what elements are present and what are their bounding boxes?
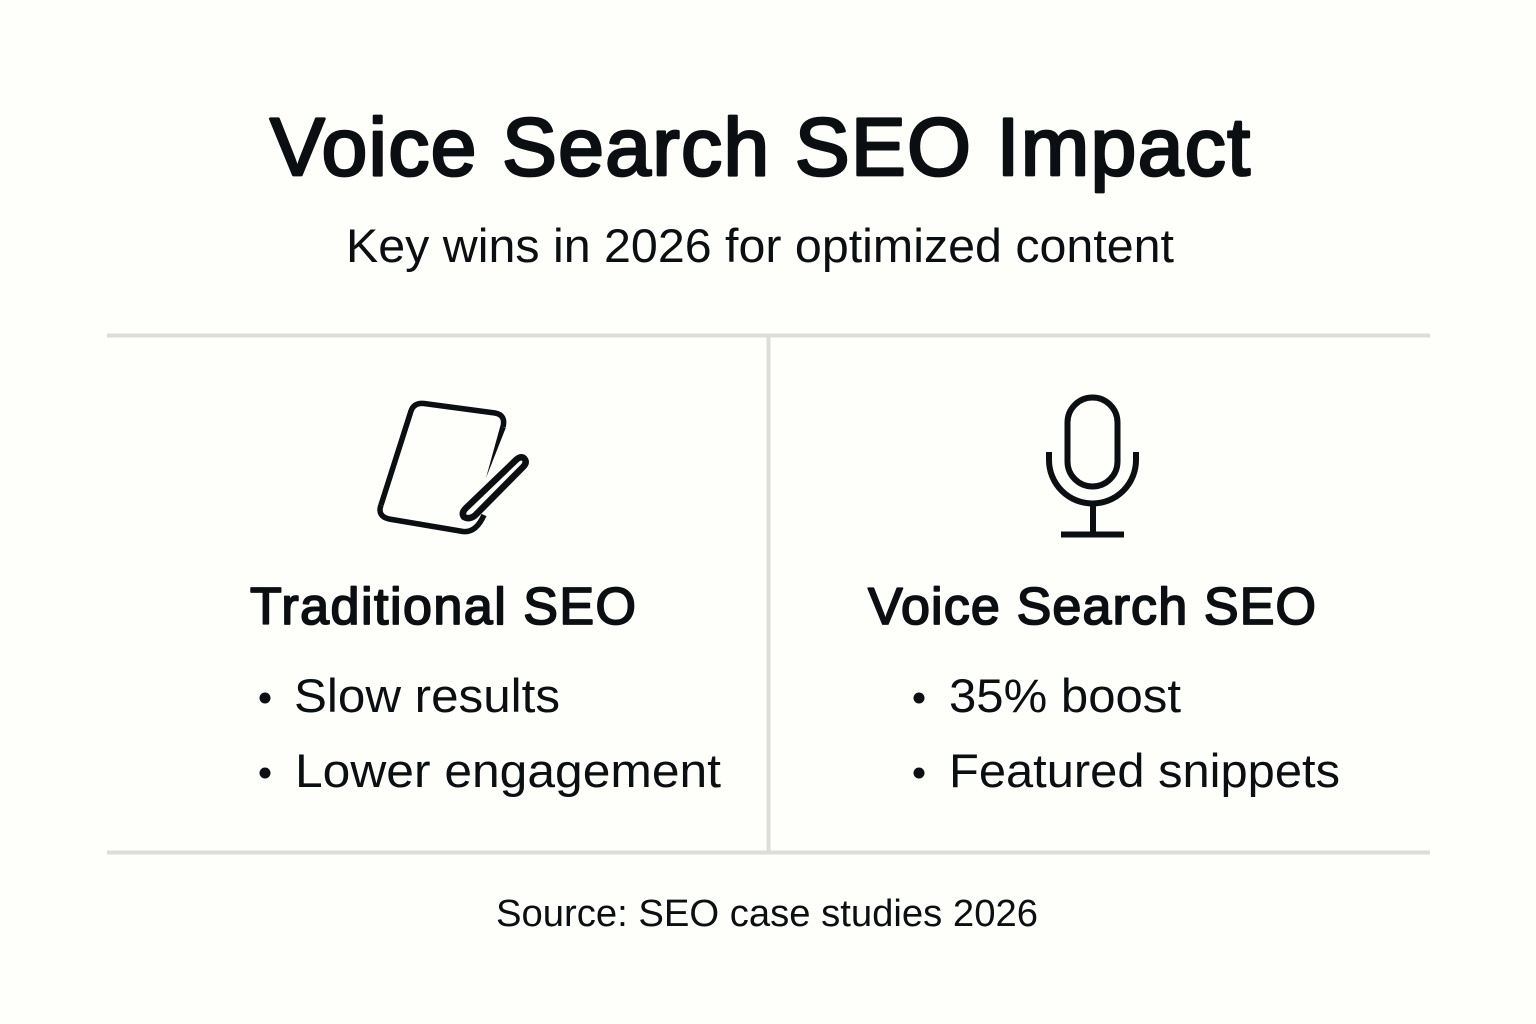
source note: Source: SEO case studies 2026	[496, 893, 1038, 935]
bullet list: traditional: Slow results	[294, 669, 560, 722]
heading: Traditional SEO: Traditional SEO	[250, 578, 636, 636]
bullet list: traditional	[260, 669, 721, 797]
panel: voice search SEO	[868, 398, 1340, 797]
title: Voice Search SEO Impact	[270, 102, 1250, 193]
bullet list: voice	[914, 669, 1340, 797]
bullet list: voice: 35% boost	[949, 669, 1181, 722]
bullet list: voice: Featured snippets	[949, 744, 1340, 797]
heading: Voice Search SEO: Voice Search SEO	[868, 578, 1316, 636]
bullet list: traditional: Lower engagement	[295, 744, 721, 797]
icon: microphone	[1049, 398, 1136, 534]
icon: note and pen	[380, 403, 526, 532]
subtitle: Key wins in 2026 for optimized content	[346, 219, 1174, 272]
panel: traditional SEO	[250, 403, 721, 797]
